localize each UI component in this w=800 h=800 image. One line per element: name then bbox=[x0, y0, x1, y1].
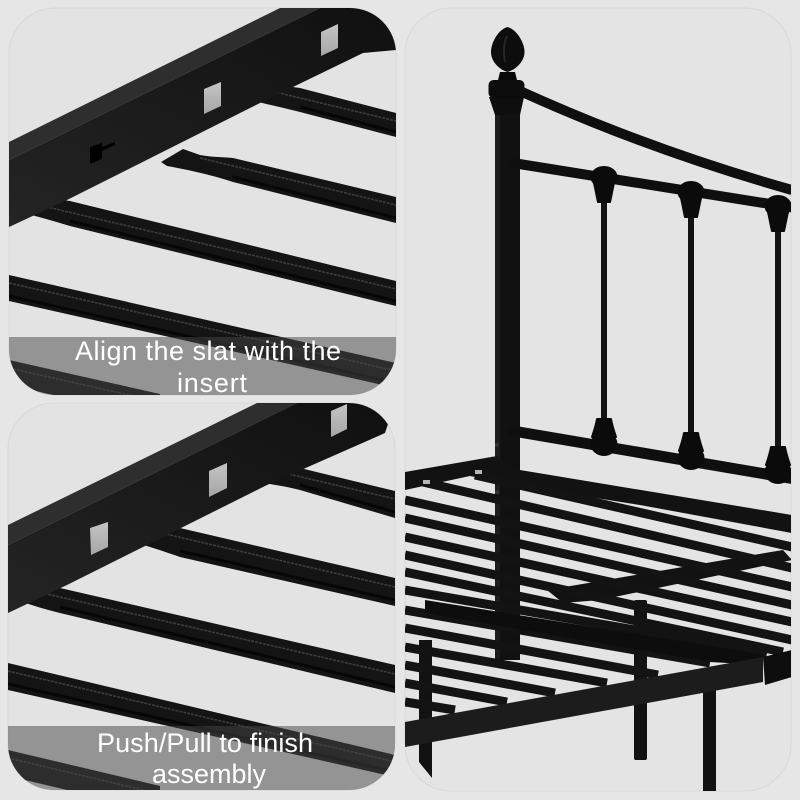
icon: post bolts bbox=[495, 443, 499, 494]
upper knuckles bbox=[592, 167, 790, 231]
lower knuckles bbox=[592, 419, 790, 483]
slat: fifth bbox=[10, 360, 160, 395]
slat: fifth bbox=[8, 750, 160, 790]
front rail bbox=[405, 657, 763, 747]
slat: third bbox=[28, 588, 395, 693]
bed rail beam bbox=[9, 8, 396, 227]
slat: loose end to be inserted bbox=[161, 149, 396, 223]
caption: push pull: Push/Pull to finish bbox=[97, 728, 313, 758]
slat: third bbox=[34, 200, 396, 306]
headboard curved top rail bbox=[520, 91, 792, 190]
caption: align the slat: insert bbox=[177, 368, 247, 398]
slat: upper right bbox=[270, 468, 395, 518]
head rail bbox=[405, 456, 792, 533]
side rail bbox=[425, 600, 763, 665]
panel: push pull bbox=[8, 403, 395, 800]
slat: fourth bbox=[8, 663, 395, 777]
icon: slat tab in beam, right bbox=[321, 24, 338, 56]
caption band bbox=[8, 726, 395, 790]
centre support beam bbox=[547, 550, 792, 603]
caption: align the slat: Align the slat with the bbox=[75, 336, 341, 366]
slat: upper right behind beam bbox=[260, 87, 396, 137]
panel: align the slat bbox=[9, 8, 396, 419]
slat: second bbox=[146, 528, 395, 606]
panel: bed frame overview bbox=[405, 8, 795, 791]
icon: slat tab, left bbox=[90, 522, 108, 555]
caption: push pull: assembly bbox=[152, 759, 266, 789]
icon: slat tab in beam bbox=[204, 82, 221, 114]
caption band bbox=[9, 337, 396, 395]
legs bbox=[419, 600, 716, 791]
slats bbox=[405, 475, 792, 710]
headboard upper cross rail bbox=[513, 163, 795, 208]
slat: fourth bbox=[9, 275, 396, 388]
headboard post bbox=[488, 27, 524, 660]
headboard spindles bbox=[601, 200, 781, 450]
icon: slat tabs at head rail bbox=[423, 470, 482, 484]
headboard lower cross rail bbox=[513, 431, 795, 479]
rail connector bbox=[763, 650, 792, 685]
icon: empty slot in beam bbox=[90, 142, 115, 164]
icon: slat tab, middle bbox=[209, 463, 227, 497]
bed rail beam bbox=[8, 403, 395, 613]
icon: slat tab, right bbox=[331, 404, 347, 437]
